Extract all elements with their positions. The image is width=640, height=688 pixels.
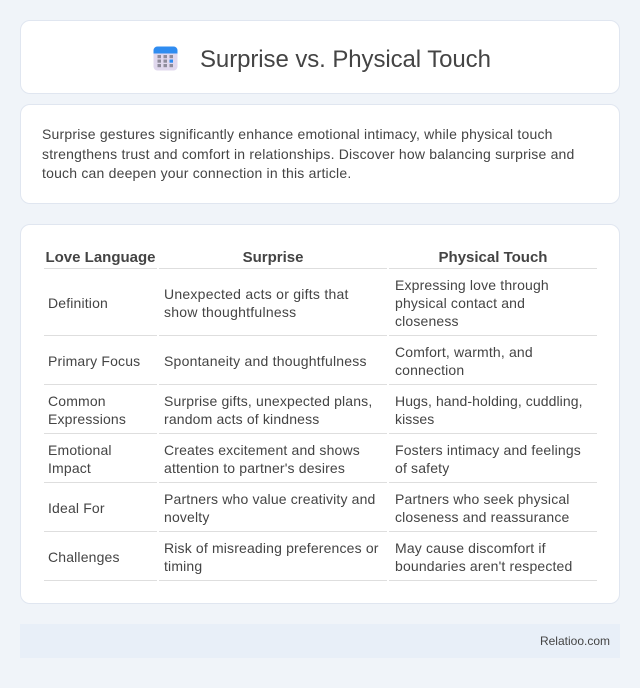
text: Ideal For [48,500,105,516]
table row: Ideal For [44,491,597,532]
text: Risk of misreading preferences or [164,540,379,556]
text: random acts of kindness [164,411,319,427]
text: Expressions [48,411,126,427]
table header [44,249,597,269]
text: Hugs, hand-holding, cuddling, [395,393,583,409]
text: boundaries aren't respected [395,558,572,574]
text: connection [395,362,464,378]
text block: introduction: Surprise gestures significantly enhance emotional intimacy, while physical touch [42,126,553,142]
text: of safety [395,460,449,476]
text: Challenges [48,549,120,565]
text: Creates excitement and shows [164,442,360,458]
text: Surprise gifts, unexpected plans, [164,393,372,409]
text: Primary Focus [48,353,140,369]
text: Physical Touch [439,249,547,266]
text: show thoughtfulness [164,304,296,320]
text: Common [48,393,106,409]
footer text: Relatioo.com [540,634,610,648]
text: timing [164,558,202,574]
text: Definition [48,295,108,311]
title: Surprise vs. Physical Touch [200,46,491,73]
text: Spontaneity and thoughtfulness [164,353,367,369]
text: Impact [48,460,91,476]
text: May cause discomfort if [395,540,546,556]
text: novelty [164,509,209,525]
text: Comfort, warmth, and [395,344,533,360]
text: Expressing love through [395,277,549,293]
text: closeness and reassurance [395,509,569,525]
panel: introduction [20,104,620,204]
table row: Primary Focus [44,344,597,385]
text: Emotional [48,442,112,458]
table row: Emotional Impact [44,442,597,483]
text: closeness [395,313,459,329]
text: Partners who seek physical [395,491,570,507]
text block: introduction [42,126,575,181]
text block: introduction: strengthens trust and comfort in relationships. Discover how balancing surprise and [42,146,575,162]
footer bar [20,624,620,658]
table row: Challenges [44,540,597,581]
text: Love Language [45,249,156,266]
table row: Definition [44,277,597,336]
text: kisses [395,411,434,427]
text: attention to partner's desires [164,460,345,476]
text: Fosters intimacy and feelings [395,442,581,458]
icon: calendar [154,46,178,70]
table row: Common Expressions [44,393,597,434]
text: Unexpected acts or gifts that [164,286,349,302]
text: Surprise [243,249,303,266]
panel: title card [20,20,620,94]
text block: introduction: touch can deepen your connection in this article. [42,165,351,181]
text: physical contact and [395,295,525,311]
panel: comparison table [20,224,620,604]
text: Partners who value creativity and [164,491,376,507]
